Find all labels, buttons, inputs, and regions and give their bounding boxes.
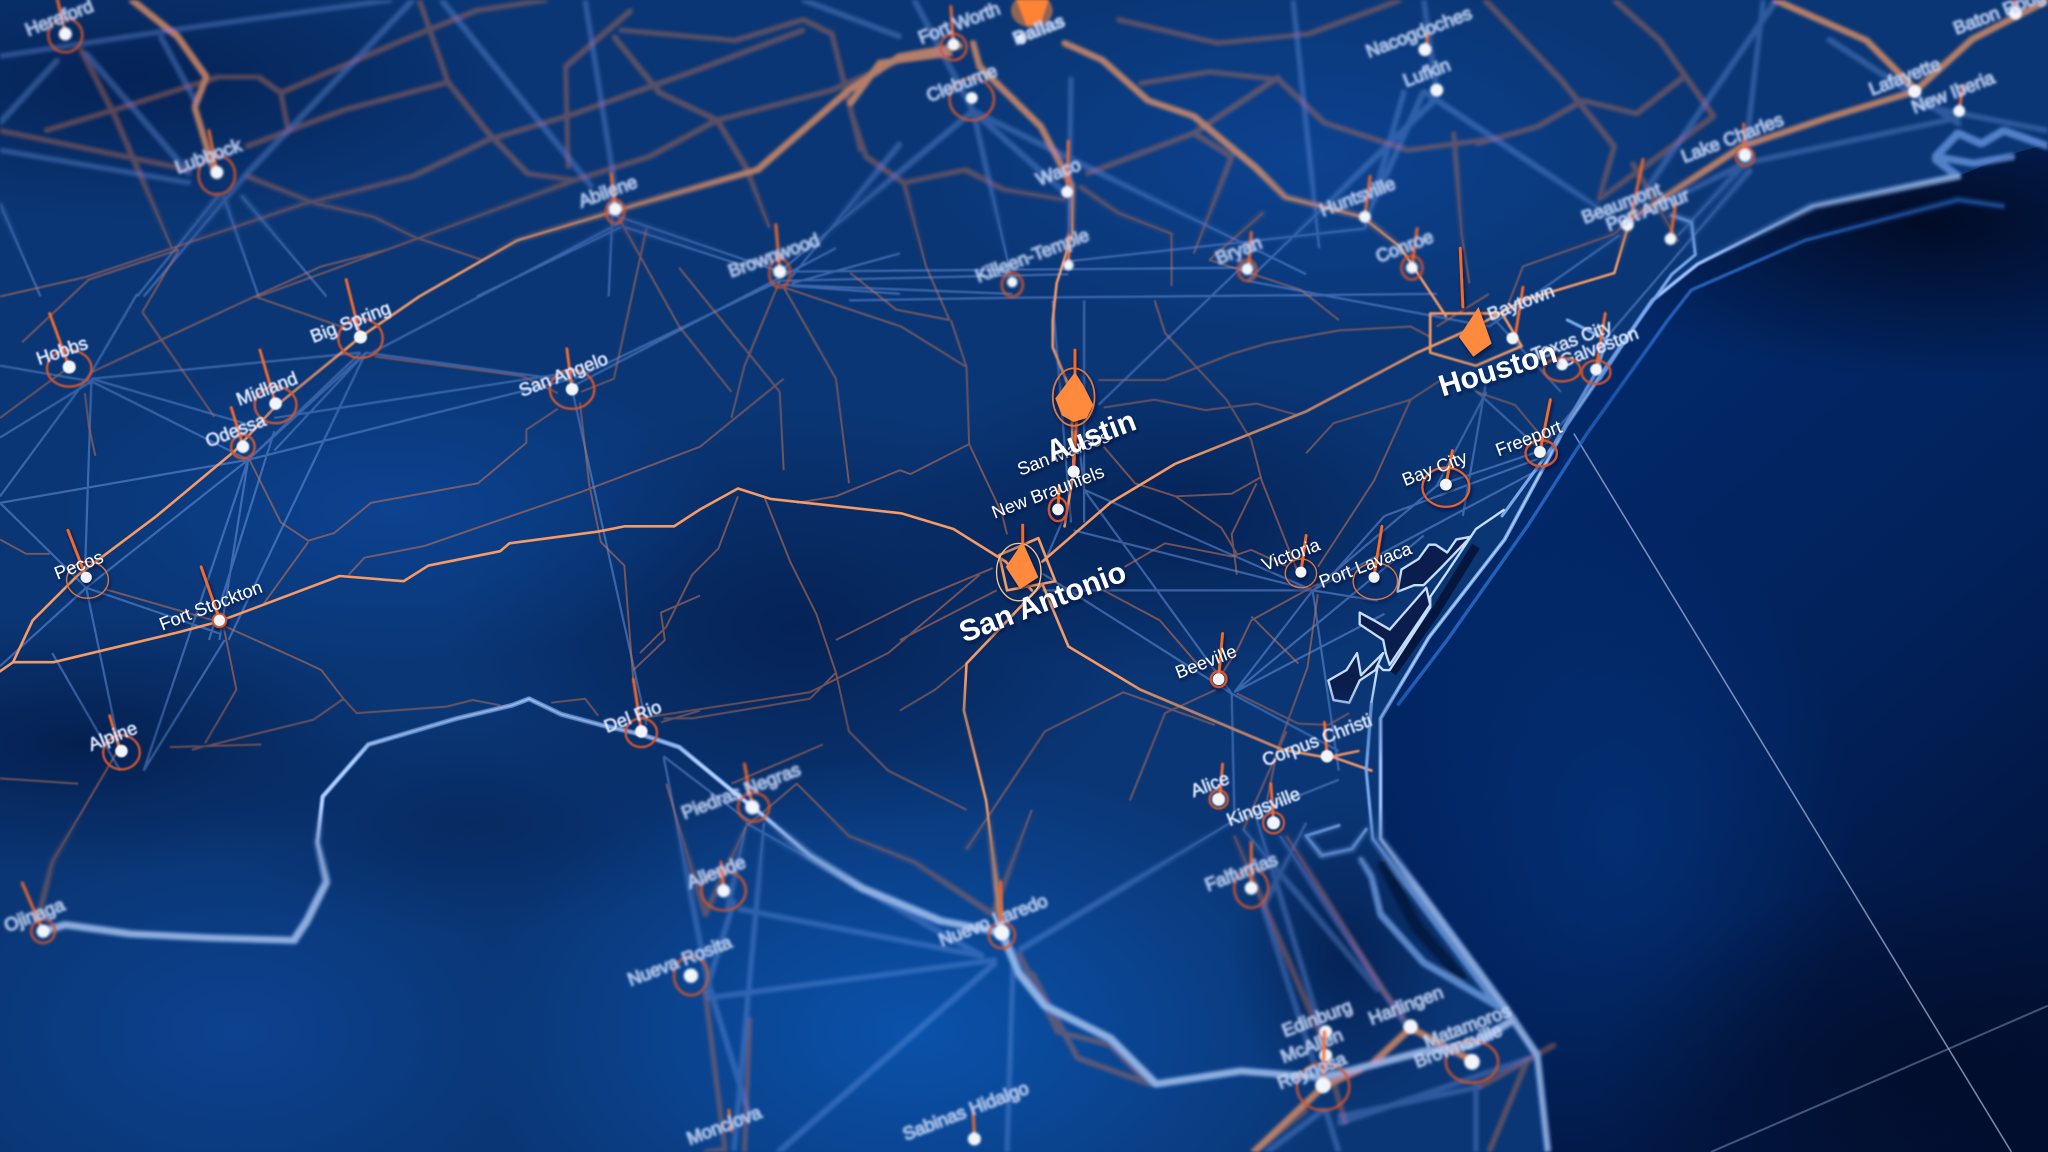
city: Waco [1033,141,1083,198]
sea: Gulf of Mexico [1382,144,2048,1152]
city: Lufkin: Lufkin [1400,54,1453,91]
city: Nueva Rosita: Nueva Rosita [625,931,735,990]
city: Beaumont: Beaumont [1579,178,1664,228]
city: Hobbs [33,313,91,387]
city: Matamoros: Matamoros [1421,1000,1513,1052]
city: Lubbock: Lubbock [172,134,245,178]
city: Lake Charles: Lake Charles [1678,109,1786,167]
city: Odessa: Odessa [202,409,269,451]
city: Pecos [51,530,108,598]
city: Pecos: Pecos [51,546,106,584]
city: Galveston [1557,313,1641,384]
city: Corpus Christi: Corpus Christi [1259,709,1375,770]
city: Nacogdoches: Nacogdoches [1363,2,1475,62]
Gulf coastline [1306,131,2048,1149]
city: Midland [233,350,300,423]
city: Monclova: Monclova [684,1101,765,1149]
major roads [0,488,1032,671]
city: Big Spring [307,280,393,358]
city: Beaumont [1579,159,1664,231]
sea grid lines [1574,434,2048,1152]
city: Beeville: Beeville [1172,640,1239,683]
city: Austin [1042,350,1141,469]
city: Texas City: Texas City [1528,315,1615,365]
city: Baytown [1484,280,1557,344]
city: Del Rio [601,679,664,747]
city: Freeport [1492,400,1564,466]
city: Abilene: Abilene [576,171,640,211]
coastal bays [1328,509,1505,703]
city: Kingsville: Kingsville [1224,783,1303,830]
city: Sabinas Hidalgo: Sabinas Hidalgo [900,1077,1031,1144]
city: New Iberia: New Iberia [1908,66,1998,117]
city: Port Arthur: Port Arthur [1603,184,1692,235]
city: Huntsville: Huntsville [1317,172,1398,220]
city: Nuevo Laredo: Nuevo Laredo [936,890,1050,950]
city: Falfurrias: Falfurrias [1202,848,1280,895]
city: Ojinaga [1,883,68,943]
city: San Angelo: San Angelo [516,347,611,401]
city: Austin: Austin [1042,404,1141,469]
city: Victoria: Victoria [1259,533,1324,575]
city: Reynosa: Reynosa [1274,1047,1350,1093]
city: Alpine: Alpine [85,717,140,755]
city: Lubbock [172,131,245,195]
city: Bay City: Bay City [1399,446,1471,490]
city: Cleburne: Cleburne [923,60,1000,106]
city: Lafayette: Lafayette [1866,53,1943,99]
city: Reynosa [1274,1032,1350,1110]
city: Houston [1435,248,1561,403]
city: Brownwood: Brownwood [725,229,822,281]
city: Port Lavaca: Port Lavaca [1316,537,1415,592]
city: Edinburg: Edinburg [1279,995,1355,1041]
city: Fort Stockton: Fort Stockton [156,576,265,634]
city: Bryan: Bryan [1212,232,1265,268]
city: Brownsville: Brownsville [1411,1019,1505,1072]
city: Galveston: Galveston [1557,322,1641,371]
city: Big Spring: Big Spring [307,297,393,347]
city: Conroe: Conroe [1373,225,1436,267]
city: Freeport: Freeport [1492,416,1564,460]
city: Hobbs: Hobbs [33,332,90,369]
city: Midland: Midland [233,367,300,410]
coastal shadow band [1382,200,2004,980]
city: San Antonio: San Antonio [955,556,1131,649]
city: New Braunfels: New Braunfels [989,460,1107,523]
city: Harlingen: Harlingen [1365,981,1446,1029]
transport network (in-focus copy) [0,356,1635,754]
city: Baytown: Baytown [1484,280,1557,325]
city: Houston: Houston [1435,336,1561,403]
city: Allende [684,851,748,910]
city: Allende: Allende [684,851,748,892]
city: Killeen-Temple: Killeen-Temple [972,224,1092,286]
city: Waco: Waco [1033,154,1083,190]
city: Ojinaga: Ojinaga [1,893,68,936]
city: McAllen: McAllen [1278,1024,1346,1067]
city: San Marcos: San Marcos [1014,425,1113,480]
Rio Grande border [43,699,1515,1084]
city: Alice: Alice [1188,767,1232,801]
city: Piedras Negras: Piedras Negras [678,758,803,823]
city: Del Rio: Del Rio [601,696,664,737]
city: Dallas: Dallas [1010,10,1068,49]
